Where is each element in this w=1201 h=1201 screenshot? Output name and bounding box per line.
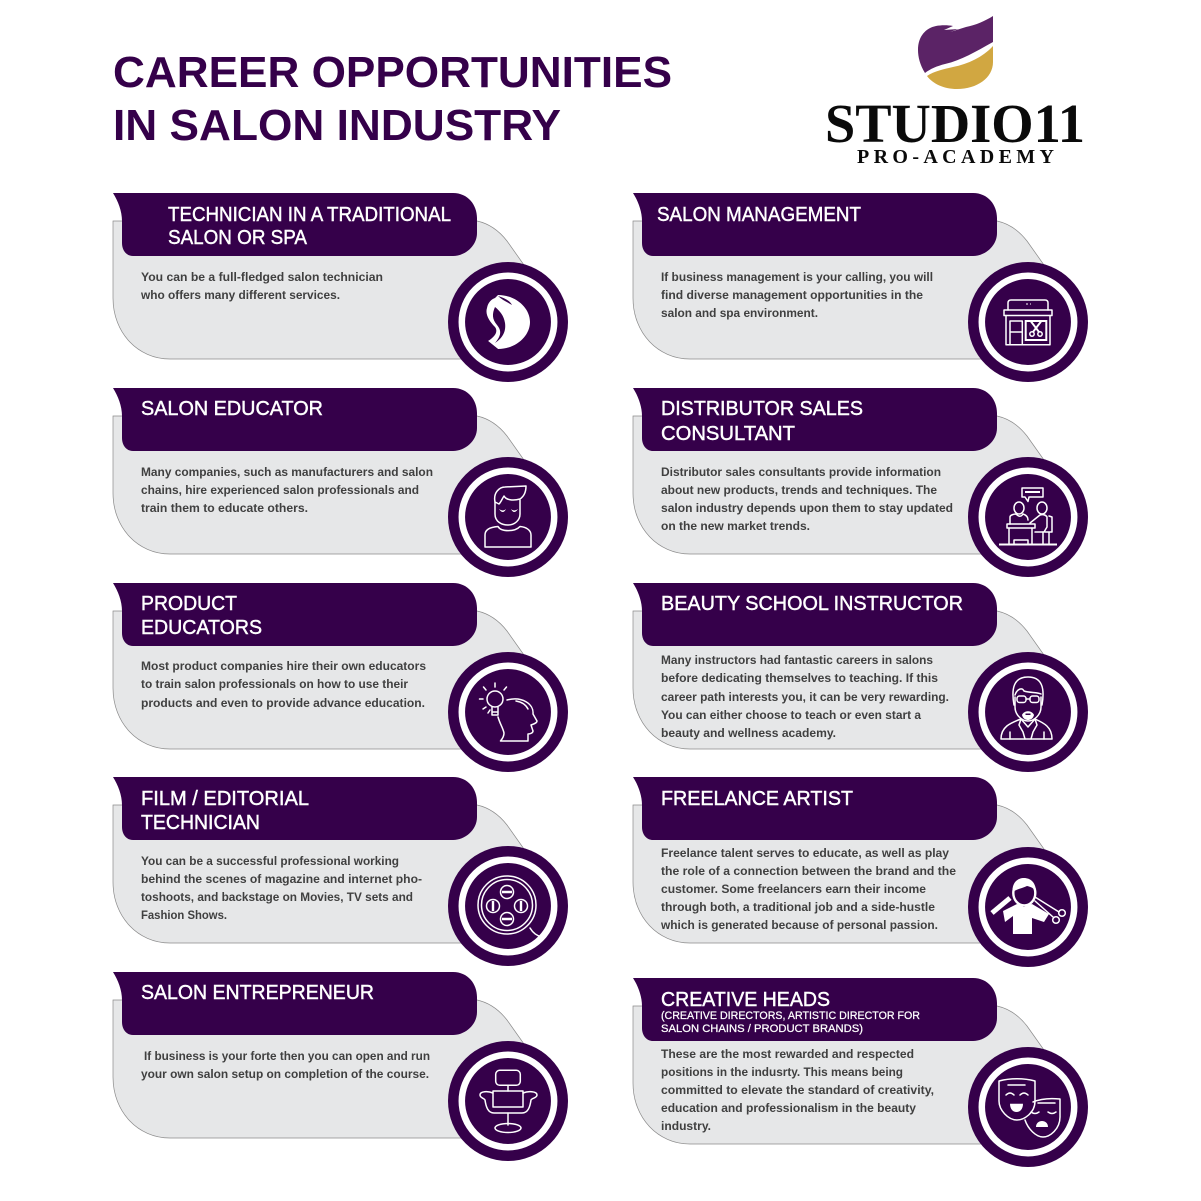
body text: [660, 846, 956, 932]
heading: FREELANCE ARTIST: [661, 787, 853, 810]
icon: theatre masks: [968, 1047, 1088, 1167]
header tab: [633, 583, 997, 646]
body text: [661, 465, 953, 533]
icon: salon chair: [448, 1041, 568, 1161]
body text: [140, 270, 383, 302]
body text: You can be a full-fledged salon technician: [141, 270, 383, 284]
heading: SALON MANAGEMENT: [657, 203, 861, 226]
heading: DISTRIBUTOR SALES: [661, 397, 863, 420]
heading: SALON EDUCATOR: [141, 397, 323, 420]
panel: creative heads: [633, 978, 1088, 1167]
card background: [633, 1006, 1044, 1144]
heading: (CREATIVE DIRECTORS, ARTISTIC DIRECTOR FOR: [661, 1010, 920, 1022]
body text: education and professionalism in the beauty: [661, 1101, 916, 1115]
body text: which is generated because of personal passion.: [660, 918, 938, 932]
header tab: [113, 777, 477, 840]
heading: TECHNICIAN IN A TRADITIONAL: [168, 203, 451, 226]
header tab: [633, 193, 997, 256]
body text: your own salon setup on completion of the course.: [141, 1067, 429, 1081]
icon: consultation at a desk: [968, 457, 1088, 577]
panel: product educators: [113, 583, 568, 772]
title: IN SALON INDUSTRY: [113, 101, 561, 150]
card background: [633, 805, 1044, 943]
body text: about new products, trends and techniques. The: [661, 483, 937, 497]
body text: Distributor sales consultants provide information: [661, 465, 941, 479]
header tab: [113, 388, 477, 451]
panel: technician in a traditional salon or spa: [113, 193, 568, 382]
body text: [661, 653, 949, 740]
logo: Studio11 Pro-Academy: PRO-ACADEMY: [857, 146, 1055, 168]
card background: [633, 416, 1044, 554]
body text: You can either choose to teach or even start a: [661, 708, 921, 722]
body text: industry.: [661, 1119, 711, 1133]
icon: educator portrait: [448, 457, 568, 577]
header tab: [113, 972, 477, 1035]
body text: to train salon professionals on how to use their: [141, 677, 408, 691]
icon: hair profile: [448, 262, 568, 382]
icon: stylist with comb and scissors: [968, 847, 1088, 967]
body text: committed to elevate the standard of creativity,: [661, 1083, 934, 1097]
body text: You can be a successful professional working: [141, 854, 399, 868]
body text: Freelance talent serves to educate, as well as play: [661, 846, 949, 860]
body text: Most product companies hire their own educators: [141, 659, 426, 673]
heading: SALON OR SPA: [168, 226, 307, 249]
panel: salon entrepreneur: [113, 972, 568, 1161]
header tab: [633, 388, 997, 451]
heading: [141, 787, 309, 834]
body text: customer. Some freelancers earn their income: [661, 882, 926, 896]
body text: through both, a traditional job and a side-hustle: [661, 900, 935, 914]
card background: [113, 221, 524, 359]
body text: If business management is your calling, you will: [661, 270, 933, 284]
logo: Studio11 Pro-Academy: STUDIO11: [825, 93, 1085, 154]
header tab: [113, 193, 477, 256]
logo mark: hair swoosh: [918, 16, 993, 89]
body text: [661, 270, 933, 320]
header tab: [113, 583, 477, 646]
icon: film reel: [448, 846, 568, 966]
panel: distributor sales consultant: [633, 388, 1088, 577]
icon: head with light bulb: [448, 652, 568, 772]
body text: train them to educate others.: [141, 501, 308, 515]
card background: [113, 416, 524, 554]
header tab: [633, 978, 997, 1041]
body text: toshoots, and backstage on Movies, TV sets and: [141, 890, 413, 904]
header tab: [633, 777, 997, 840]
body text: [141, 659, 426, 710]
card background: [113, 1000, 524, 1138]
icon: salon storefront: [968, 262, 1088, 382]
icon: instructor with glasses: [968, 652, 1088, 772]
card background: [633, 611, 1044, 749]
heading: [168, 203, 451, 249]
heading: BEAUTY SCHOOL INSTRUCTOR: [661, 592, 963, 615]
panel: salon management: [633, 193, 1088, 382]
body text: These are the most rewarded and respected: [661, 1047, 914, 1061]
body text: the role of a connection between the brand and the: [661, 864, 956, 878]
heading: [661, 397, 863, 445]
body text: chains, hire experienced salon professionals and: [141, 483, 419, 497]
title: [113, 48, 672, 150]
heading: PRODUCT: [141, 592, 237, 615]
heading: CONSULTANT: [661, 422, 795, 445]
panel: freelance artist: [633, 777, 1088, 967]
body text: Many companies, such as manufacturers and salon: [141, 465, 433, 479]
heading: EDUCATORS: [141, 616, 262, 639]
logo: Studio11 Pro-Academy: [825, 16, 1085, 168]
body text: who offers many different services.: [140, 288, 340, 302]
body text: Many instructors had fantastic careers in salons: [661, 653, 933, 667]
body text: If business is your forte then you can open and run: [144, 1049, 430, 1063]
body text: on the new market trends.: [661, 519, 810, 533]
body text: Fashion Shows.: [141, 908, 227, 922]
heading: TECHNICIAN: [141, 811, 260, 834]
heading: [661, 988, 920, 1035]
body text: before dedicating themselves to teaching. If this: [661, 671, 938, 685]
body text: beauty and wellness academy.: [661, 726, 836, 740]
panel: film / editorial technician: [113, 777, 568, 966]
heading: [141, 592, 262, 639]
card background: [113, 611, 524, 749]
heading: FILM / EDITORIAL: [141, 787, 309, 810]
panel: salon educator: [113, 388, 568, 577]
body text: find diverse management opportunities in the: [661, 288, 923, 302]
body text: career path interests you, it can be very rewarding.: [661, 690, 949, 704]
body text: [661, 1047, 934, 1133]
body text: positions in the indusrty. This means being: [661, 1065, 903, 1079]
title: CAREER OPPORTUNITIES: [113, 48, 672, 97]
card background: [633, 221, 1044, 359]
body text: [141, 854, 422, 922]
heading: CREATIVE HEADS: [661, 988, 830, 1011]
body text: [141, 1049, 430, 1081]
panel: beauty school instructor: [633, 583, 1088, 772]
body text: products and even to provide advance education.: [141, 696, 425, 710]
heading: SALON CHAINS / PRODUCT BRANDS): [661, 1023, 863, 1035]
body text: salon industry depends upon them to stay updated: [661, 501, 953, 515]
card background: [113, 805, 524, 943]
body text: behind the scenes of magazine and internet pho-: [141, 872, 422, 886]
body text: salon and spa environment.: [661, 306, 818, 320]
heading: SALON ENTREPRENEUR: [141, 981, 374, 1004]
body text: [141, 465, 433, 515]
